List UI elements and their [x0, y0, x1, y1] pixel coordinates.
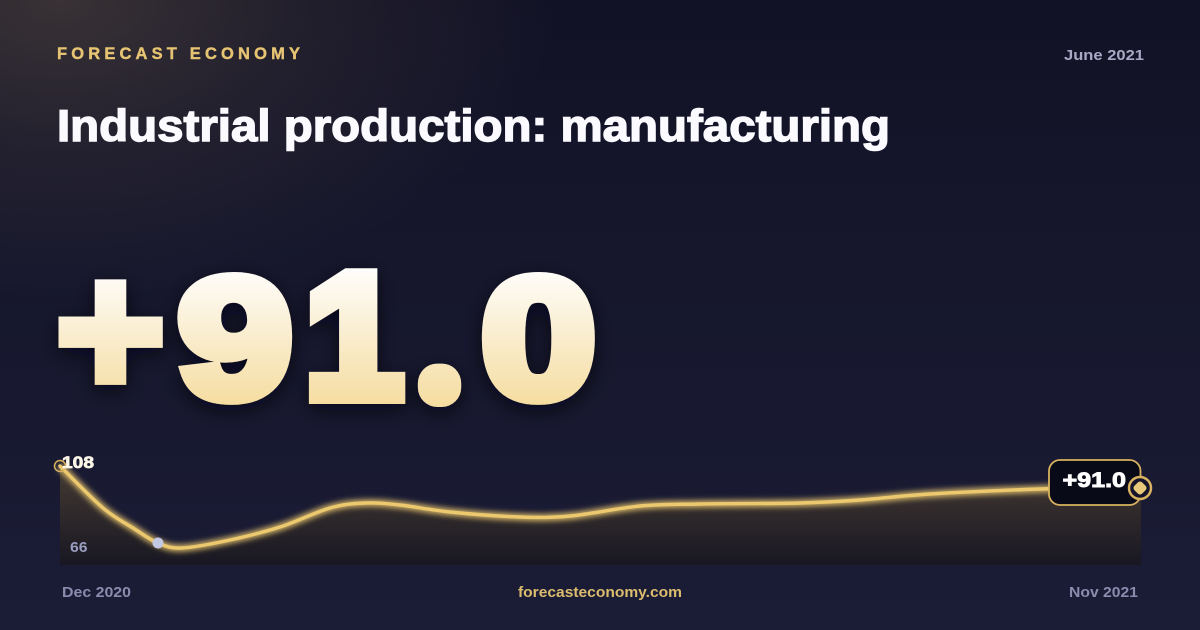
headline value: + [56, 227, 165, 434]
start marker [54, 460, 66, 472]
brand label: FORECAST ECONOMY [57, 45, 300, 63]
max label: 108 [62, 453, 94, 472]
title: Industrial production: manufacturing [57, 102, 890, 151]
headline value: 9 [178, 243, 292, 433]
end date label: Nov 2021 [1069, 584, 1138, 601]
date: June 2021 [1064, 47, 1144, 64]
headline value [56, 227, 596, 435]
headline value: . [435, 362, 444, 394]
data line [60, 466, 1141, 548]
min label: 66 [70, 540, 88, 556]
headline value: 0 [481, 243, 596, 433]
end value badge: +91.0 [1062, 468, 1126, 492]
chart area fill [60, 466, 1141, 565]
line chart [54, 453, 1151, 565]
end marker [1129, 477, 1151, 499]
end value badge [1049, 460, 1140, 505]
headline value: 1 [305, 237, 403, 435]
line glow [60, 466, 1141, 548]
source url: forecasteconomy.com [518, 584, 682, 601]
start date label: Dec 2020 [62, 584, 131, 601]
minimum marker [152, 538, 164, 548]
